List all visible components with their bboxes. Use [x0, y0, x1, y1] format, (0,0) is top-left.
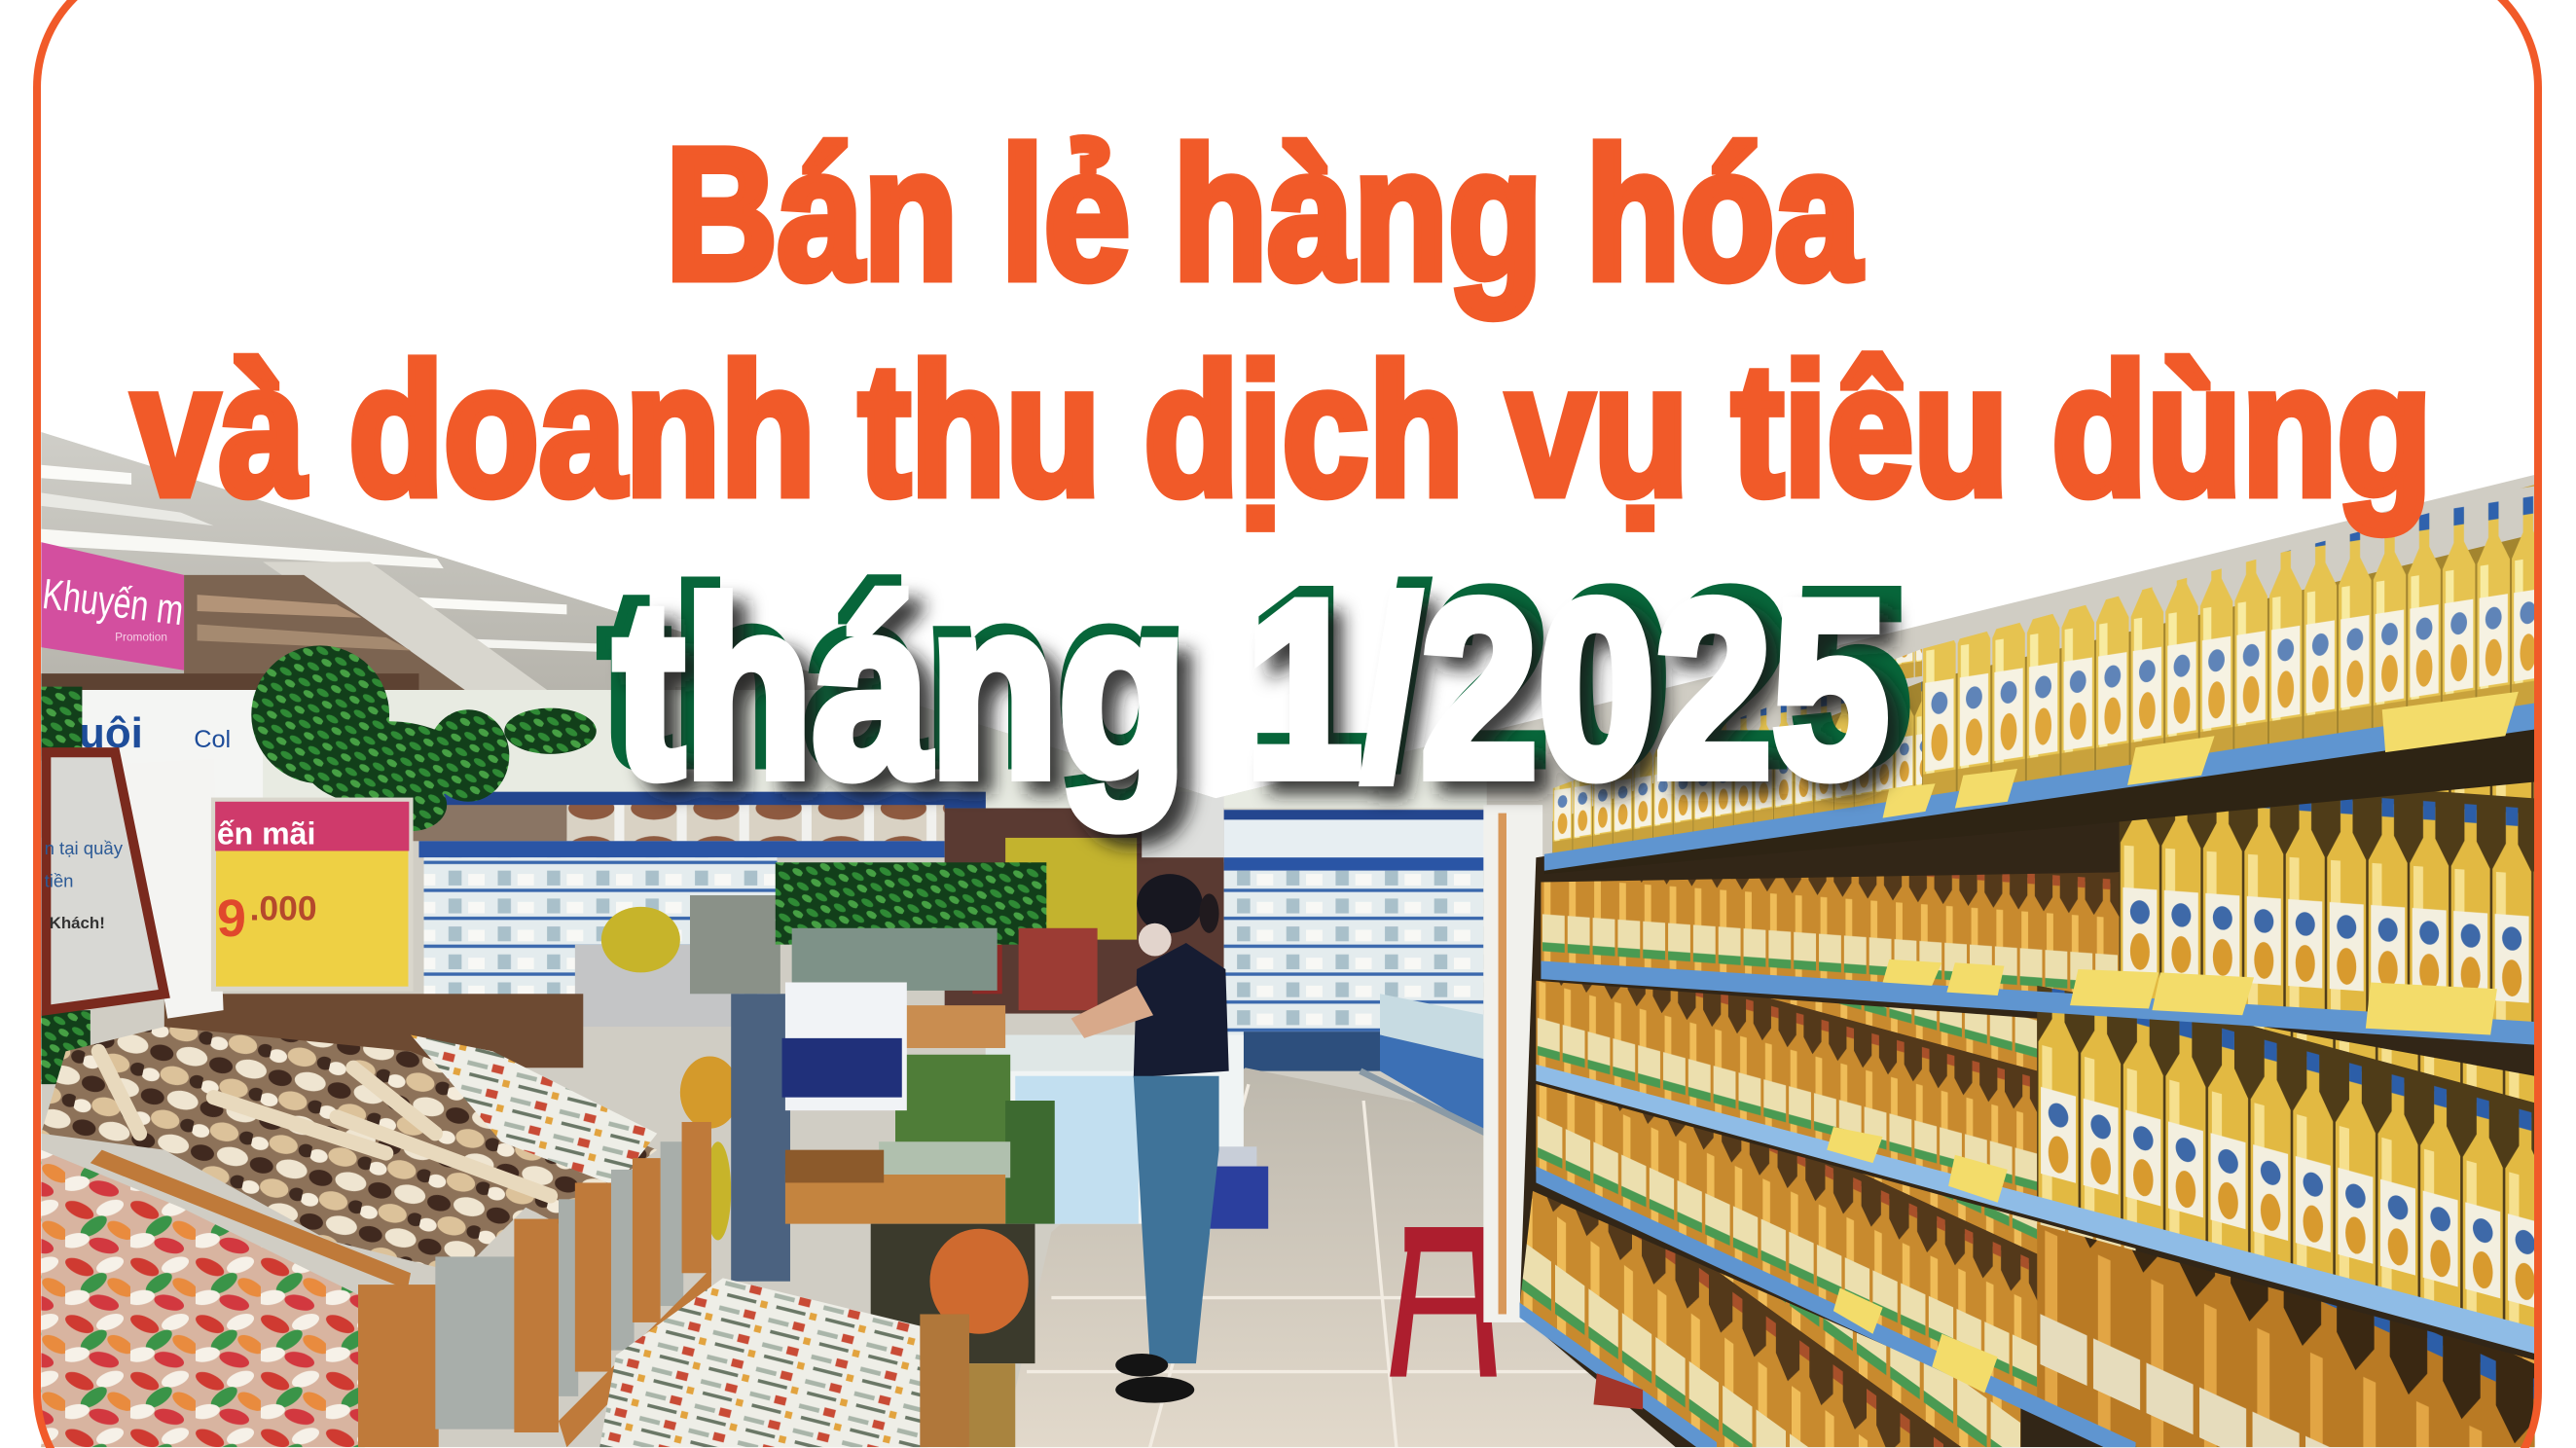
icon: pink promotion sign: [40, 542, 186, 670]
back centre wall: [945, 792, 1224, 1014]
flowers and plants: [575, 862, 1098, 1241]
yellow price sign: 9: [217, 889, 246, 948]
row: top shelf bottles: [1552, 485, 2535, 857]
tree foliage: [41, 645, 597, 1084]
back wall and store banner: Col: [194, 726, 231, 753]
yellow price sign: ến mãi: [217, 816, 315, 851]
white packets: [411, 1035, 657, 1186]
row: third shelf bottles: [1536, 981, 2535, 1339]
date heading green copy: tháng 1/2025: [599, 536, 1911, 818]
blue display stand: [731, 994, 790, 1282]
icon: pink promotion sign: Khuyến m: [40, 570, 186, 634]
woman shopper: [1071, 874, 1229, 1403]
yellow price sign: [213, 800, 411, 989]
floor: [1002, 1068, 1676, 1447]
brown framed sign: n tại quầy: [45, 838, 124, 858]
yellow price sign: .000: [250, 888, 317, 927]
red stool: [1390, 1227, 1497, 1377]
price tags: [1827, 692, 2519, 1394]
promo poster: [782, 982, 907, 1110]
counter behind produce: [164, 994, 583, 1068]
ceiling: [41, 432, 945, 838]
title: line 1: Bán lẻ hàng hóa: [666, 109, 1862, 318]
brown framed sign: tiền: [45, 871, 73, 891]
back wall and store banner: [41, 687, 1487, 857]
back right fridge: [1224, 810, 1487, 1071]
brown framed sign: Khách!: [50, 914, 105, 932]
back wall and store banner: uôi: [79, 709, 143, 757]
freezer island: [1361, 994, 1487, 1134]
shelf strips: [1519, 704, 2535, 1448]
white column: [1483, 805, 1542, 1322]
refrigerated aisle at back left: [424, 857, 777, 997]
right shelves: [1519, 485, 2535, 1448]
shopping basket: [1211, 1146, 1269, 1229]
icon: pink promotion sign: Promotion: [115, 630, 167, 643]
row: second shelf bottles: [1541, 772, 2535, 1035]
backing behind top-shelf bottles: [1552, 534, 2535, 857]
wooden shelves and greens: [785, 1005, 1055, 1447]
row: bottom shelf bottles: [1519, 1191, 2020, 1447]
row: fourth shelf bottles: [1536, 1084, 2535, 1447]
date heading white face: tháng 1/2025: [614, 548, 1889, 830]
candy bin: [41, 1150, 365, 1447]
brown framed sign: [45, 752, 164, 1010]
mushroom candy pile: [41, 1027, 657, 1273]
shop freezer: [986, 1035, 1244, 1224]
photo base: [41, 427, 2538, 1448]
panel: supermarket photo scene: [40, 427, 2538, 1448]
date heading: tháng 1/2025: [599, 536, 1911, 843]
wooden bin frame: [91, 1122, 711, 1447]
white board behind sign: [130, 805, 224, 1019]
packaged goods bin: [599, 1278, 969, 1447]
date heading shadow: tháng 1/2025: [629, 561, 1904, 843]
